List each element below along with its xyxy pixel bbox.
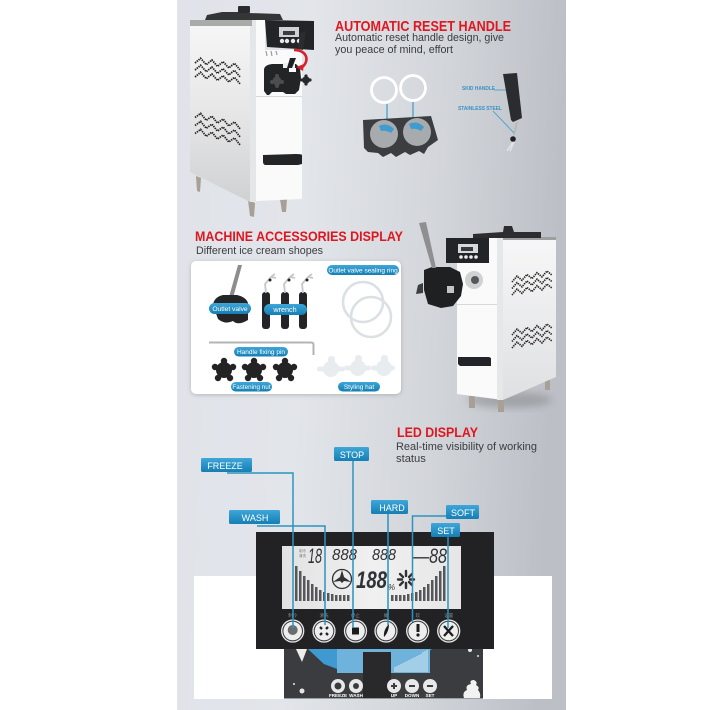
LCD small captions: 制冷 [299,548,306,553]
button captions: 清洗 [320,612,329,619]
labels: lower buttons: DOWN [405,693,420,698]
labels: lower buttons: FREEZE [329,693,347,698]
button captions: 制冷 [288,612,298,619]
heading: machine accessories display: MACHINE ACCESSORIES DISPLAY [195,228,404,244]
icon: snowflake [398,571,414,588]
callout: SOFT: SOFT [451,508,476,518]
vent zigzags [195,58,240,145]
text: LED display description [396,441,537,465]
label: outlet valve: Outlet valve [212,306,248,313]
label: stainless steel: STAINLESS STEEL [458,106,503,112]
callout: SET: SET [437,526,455,536]
icon: styling hats [317,355,395,377]
button captions: 停止 [351,612,360,619]
text: reset handle description [335,32,504,56]
product image: machine front three-quarter view [416,222,556,412]
heading: automatic reset handle: AUTOMATIC RESET HANDLE [335,19,511,35]
labels: lower buttons: UP [391,693,397,698]
LCD readouts: % [388,583,395,592]
LCD small captions: 清洗 [299,553,306,558]
label: handle fixing pin: Handle fixing pin [237,349,285,356]
label: wrench [264,304,307,315]
label: styling hat [338,382,380,392]
callout: WASH: WASH [242,513,268,523]
label: fastening nut: Fastening nut [232,384,271,391]
callout: WASH [229,510,280,524]
LCD readouts: 888 [372,547,396,564]
LCD readouts: 888 [332,547,357,564]
button captions: 硬 [384,613,389,619]
callout: STOP: STOP [340,450,364,460]
callout: HARD [371,500,408,514]
button captions [288,612,454,619]
icon: sealing rings [343,282,391,337]
label: handle fixing pin [234,347,288,356]
text: accessories subtitle: Different ice cream shopes [196,245,323,257]
icon: cone [296,649,307,662]
bar gauges [295,566,446,601]
heading: LED display: LED DISPLAY [397,425,478,440]
icon: three wrenches [262,274,313,329]
buttons [282,620,460,642]
text: LED display description: status [396,453,426,465]
panel: LED control board [256,532,494,649]
LCD readouts: 188 [356,567,388,594]
white backing rectangle [194,576,552,699]
callout lines [227,460,448,628]
button captions: 软 [415,612,420,619]
LCD screen [282,545,461,609]
diagram: handle with callouts [458,73,522,151]
text: LED display description: Real-time visibility of working [396,441,537,453]
labels: lower buttons: SET [426,693,435,698]
callout: FREEZE [201,458,252,472]
decorative stars [293,648,479,694]
label: skid handle: SKID HANDLE [462,86,495,92]
callout: STOP [334,447,369,461]
product image: machine with reset handle [190,6,314,217]
button captions: 设置 [444,612,454,619]
LCD readouts: 18 [308,545,322,568]
label: wrench: wrench [272,305,297,314]
icon: fan [332,570,352,588]
vent zigzags [512,271,552,348]
label: outlet valve sealing ring [327,265,399,275]
icon: outlet valve [213,265,248,323]
labels: lower buttons: WASH [349,693,364,698]
diagram: sealing rings and valve plate [363,76,438,157]
panel: gradient background [177,0,566,710]
label: outlet valve [209,303,251,314]
icon: soft serve [463,680,480,698]
icons: lower buttons [331,679,437,693]
LCD small captions [299,548,306,558]
callout: SET [431,523,460,537]
label: styling hat: Styling hat [344,384,374,391]
text: reset handle description: Automatic reset handle design, give [335,32,504,44]
callout: FREEZE: FREEZE [207,461,243,471]
callout: HARD: HARD [379,503,405,513]
LCD readouts: —88 [412,545,447,568]
icon: handle fixing pin [209,342,314,355]
callout: SOFT [446,505,479,519]
labels: lower buttons [329,693,435,698]
panel: lower machine display [284,648,483,698]
text: reset handle description: you peace of mind, effort [335,44,454,56]
label: fastening nut [231,382,272,392]
label: outlet valve sealing ring: Outlet valve sealing ring [328,267,398,274]
LCD readouts [308,545,447,594]
icon: fastening nuts [212,358,297,381]
panel: accessories card [191,261,401,394]
